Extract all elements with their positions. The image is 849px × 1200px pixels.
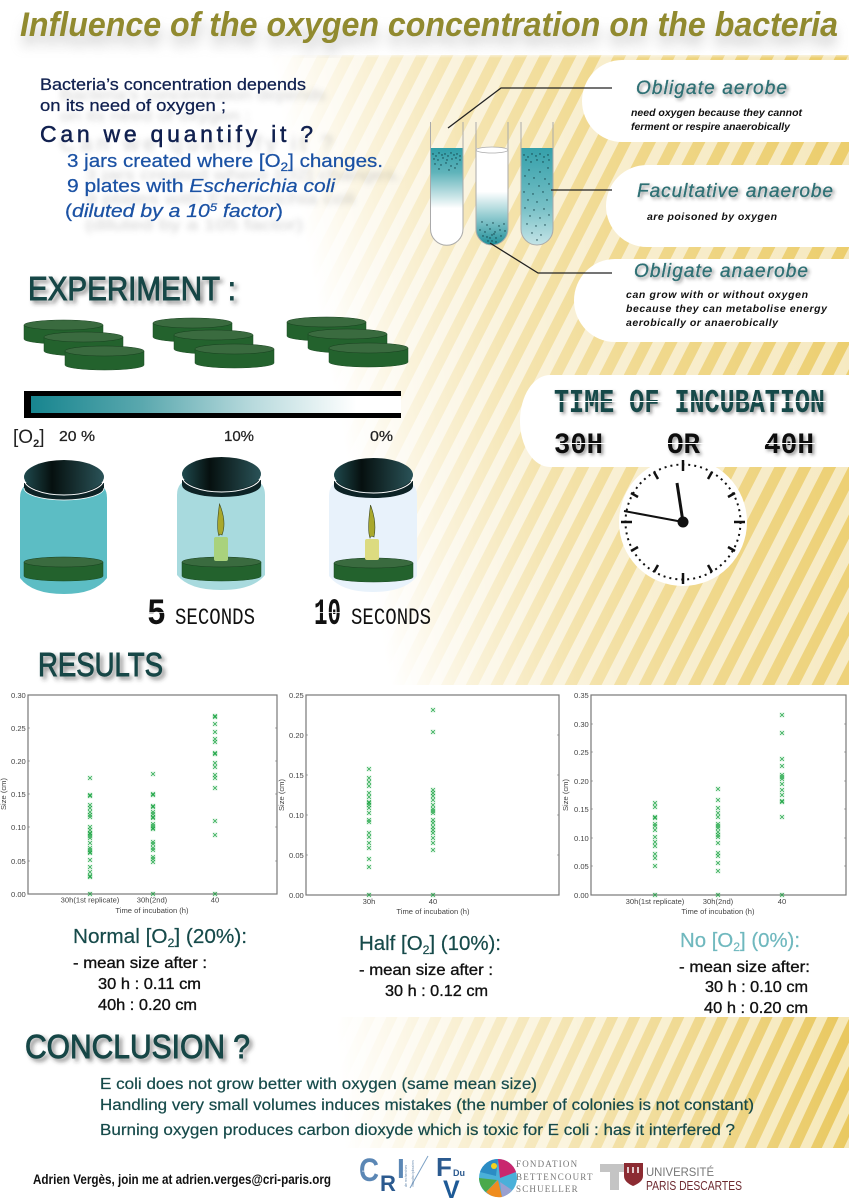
result: no oxygen: No [O	[680, 930, 732, 952]
panel: obligate anaerobe: Obligate anaerobe	[634, 261, 808, 282]
intro text block: (diluted by a 10	[65, 201, 189, 221]
panel: obligate anaerobe: can grow with or without oxygen	[626, 289, 808, 301]
chart: normal oxygen: 0.25	[11, 724, 26, 733]
logo: FDV: Du	[453, 1168, 465, 1178]
candle	[214, 504, 228, 561]
intro shadow: on its need of oxygen ;	[60, 108, 250, 125]
tube: obligate aerobe	[430, 122, 463, 245]
intro text block: 3 jars created where [O	[67, 151, 254, 171]
plates: set one	[24, 320, 144, 370]
oxygen scale labels: [O	[13, 427, 33, 448]
chart: normal oxygen: 0.20	[11, 757, 26, 766]
chart: normal oxygen: 30h(1st replicate)	[61, 896, 120, 904]
logo: Fondation Bettencourt Schueller: FONDATION	[516, 1159, 578, 1169]
panel: obligate anaerobe: because they can metabolise energy	[626, 303, 828, 315]
chart: no oxygen: 0.15	[574, 805, 589, 814]
logo: Université Paris Descartes: UNIVERSITÉ	[646, 1164, 714, 1179]
panel: facultative anaerobe: Facultative anaerobe	[637, 181, 833, 202]
logo: Fondation Bettencourt Schueller: BETTENCOURT	[516, 1172, 594, 1182]
striped background: upper area	[0, 52, 849, 685]
logo: CRI: R	[380, 1171, 396, 1196]
oxygen scale labels: 2	[33, 438, 39, 450]
chart: half oxygen: 40	[429, 897, 437, 906]
oxygen scale labels: 0%	[370, 429, 393, 445]
label: 10 seconds: SECONDS	[351, 605, 431, 631]
conclusion text: E coli does not grow better with oxygen (same mean size)	[100, 1076, 537, 1093]
heading: experiment: EXPERIMENT :	[28, 270, 236, 307]
label: 10 seconds: 10	[314, 594, 341, 636]
chart: normal oxygen: 0.10	[11, 823, 26, 832]
result: no oxygen	[679, 930, 810, 1017]
chart: normal oxygen: 0.15	[11, 790, 26, 799]
oxygen scale labels: ]	[39, 427, 44, 448]
chart: half oxygen: 0.15	[289, 771, 304, 780]
plates: set two	[153, 318, 274, 368]
chart: half oxygen: 0.25	[289, 691, 304, 700]
chart: half oxygen: Time of incubation (h)	[396, 907, 470, 916]
intro text block: factor	[217, 201, 277, 221]
intro text block: on its need of oxygen ;	[40, 97, 226, 115]
chart: normal oxygen: 40	[211, 896, 219, 904]
striped background: conclusion area	[0, 1017, 849, 1148]
result: half oxygen: Half [O	[359, 933, 421, 955]
intro shadow: (diluted by a 105 factor)	[85, 217, 303, 234]
chart: no oxygen: 30h(2nd)	[703, 897, 734, 906]
result: no oxygen: 2	[733, 940, 740, 954]
conclusion text: Burning oxygen produces carbon dioxyde which is toxic for E coli : has it interfered ?	[100, 1122, 735, 1139]
chart: normal oxygen: 30h(2nd)	[137, 896, 168, 904]
arrow: facultative tube to label	[551, 189, 612, 191]
panel: time of incubation: 30H	[554, 429, 603, 463]
intro shadow	[60, 87, 401, 234]
panel: facultative anaerobe: are poisoned by oxygen	[647, 211, 777, 223]
conclusion text: Handling very small volumes induces mistakes (the number of colonies is not constant)	[100, 1097, 754, 1114]
panel: obligate anaerobe: aerobically or anaerobically	[626, 317, 779, 329]
panel: obligate aerobe	[582, 60, 849, 142]
result: no oxygen: - mean size after:	[679, 959, 810, 976]
result: no oxygen: 30 h : 0.10 cm	[705, 979, 808, 996]
result: normal oxygen	[73, 926, 247, 1014]
chart: no oxygen	[561, 691, 846, 916]
chart: no oxygen: 0.30	[574, 720, 589, 729]
chart: no oxygen: 0.10	[574, 834, 589, 843]
chart: half oxygen: 0.00	[289, 891, 304, 900]
chart: normal oxygen: 0.05	[11, 857, 26, 866]
logo: Fondation Bettencourt Schueller	[479, 1159, 594, 1197]
chart: normal oxygen: 0.00	[11, 890, 26, 899]
chart: half oxygen: 0.10	[289, 811, 304, 820]
candle	[365, 505, 379, 560]
label: 5 seconds	[147, 594, 255, 636]
label: 5 seconds: 5	[147, 594, 166, 636]
panel: time of incubation: 40H	[764, 429, 814, 463]
arrow: aerobe tube to label	[448, 88, 612, 128]
panel: obligate aerobe: ferment or respire anaerobically	[631, 121, 791, 133]
logo: FDV: F	[436, 1152, 452, 1182]
chart: normal oxygen	[0, 691, 277, 915]
conclusion text	[100, 1076, 754, 1139]
intro text block: 9 plates with Escherichia coli	[67, 176, 336, 196]
panel: time of incubation: OR	[667, 429, 700, 463]
result: normal oxygen: ] (20%):	[174, 926, 247, 948]
result: half oxygen	[359, 933, 501, 1000]
plates: set three	[287, 317, 408, 367]
arrow: anaerobe tube to label	[490, 243, 612, 273]
chart: no oxygen: 0.05	[574, 862, 589, 871]
chart: no oxygen: 0.20	[574, 777, 589, 786]
logo: CRI: C	[359, 1152, 379, 1188]
intro shadow: 3 jars created where [O2] changes.	[85, 167, 401, 184]
jar: half oxygen with candle	[177, 457, 265, 590]
tube: facultative anaerobe	[521, 122, 553, 245]
logo: CRI: de recherches	[404, 1165, 408, 1187]
panel: obligate aerobe: need oxygen because they cannot	[631, 107, 803, 119]
logo: CRI: I	[397, 1153, 405, 1184]
test tubes	[430, 122, 553, 245]
oxygen scale labels	[13, 427, 393, 450]
intro text block: )	[276, 201, 282, 221]
intro text block: Can we quantify it ?	[40, 121, 313, 147]
chart: no oxygen: 0.35	[574, 691, 589, 700]
chart: normal oxygen: Time of incubation (h)	[115, 906, 189, 915]
oxygen scale labels: 10%	[224, 429, 254, 445]
intro text block: 5	[210, 202, 218, 214]
heading: conclusion: CONCLUSION ?	[25, 1028, 250, 1065]
chart: half oxygen	[277, 691, 559, 916]
logo: CRI: interdisciplinaires	[411, 1160, 415, 1187]
result: normal oxygen: 30 h : 0.11 cm	[98, 976, 201, 993]
logo: Université Paris Descartes	[600, 1163, 742, 1193]
result: no oxygen: ] (0%):	[740, 930, 800, 952]
chart: half oxygen: 0.05	[289, 851, 304, 860]
result: half oxygen: 30 h : 0.12 cm	[385, 983, 488, 1000]
chart: no oxygen: 40	[778, 897, 786, 906]
result: normal oxygen: 2	[167, 936, 175, 950]
label: 5 seconds: SECONDS	[175, 605, 255, 631]
jar: no oxygen with candle	[329, 458, 417, 592]
logo: Université Paris Descartes: PARIS DESCARTES	[646, 1178, 742, 1193]
chart: half oxygen: Size (cm)	[277, 778, 286, 811]
jar: normal oxygen	[20, 460, 107, 594]
result: half oxygen: 2	[423, 943, 430, 957]
heading: results: RESULTS	[38, 646, 163, 683]
chart: no oxygen: Time of incubation (h)	[681, 907, 755, 916]
panel: obligate anaerobe	[574, 259, 849, 342]
panel: obligate aerobe: Obligate aerobe	[636, 78, 787, 99]
intro text block: 2	[281, 160, 289, 174]
logo: FDV	[436, 1152, 465, 1200]
intro shadow: 9 plates with Escherichia coli	[85, 191, 355, 208]
oxygen scale labels: 20 %	[59, 429, 95, 445]
oxygen gradient bar	[24, 391, 401, 418]
logo: Fondation Bettencourt Schueller: SCHUELLER	[516, 1184, 579, 1194]
footer author credit: Adrien Vergès, join me at adrien.verges@cri-paris.org	[33, 1172, 331, 1187]
label: 10 seconds	[314, 594, 431, 636]
intro text block	[40, 76, 401, 234]
logo: CRI	[359, 1152, 428, 1196]
result: normal oxygen: - mean size after :	[73, 955, 207, 972]
chart: no oxygen: 30h(1st replicate)	[626, 897, 685, 906]
chart: normal oxygen: 0.30	[11, 691, 26, 700]
intro text block: ] changes.	[288, 151, 383, 171]
chart: no oxygen: 0.25	[574, 748, 589, 757]
panel: time of incubation	[520, 375, 849, 467]
clock	[619, 458, 747, 586]
chart: half oxygen: 0.20	[289, 731, 304, 740]
result: normal oxygen: Normal [O	[73, 926, 164, 948]
chart: no oxygen: 0.00	[574, 891, 589, 900]
result: half oxygen: - mean size after :	[359, 962, 493, 979]
intro shadow: Can we quantify it ?	[60, 131, 333, 156]
chart: no oxygen: Size (cm)	[561, 778, 570, 811]
tube: obligate anaerobe	[476, 122, 508, 245]
panel: facultative anaerobe	[606, 165, 849, 247]
result: normal oxygen: 40h : 0.20 cm	[98, 997, 197, 1014]
intro shadow: Bacteria’s concentration depends	[60, 87, 326, 104]
result: no oxygen: 40 h : 0.20 cm	[704, 1000, 808, 1017]
chart: half oxygen: 30h	[363, 897, 375, 906]
logo: CRI: centre	[362, 1169, 371, 1173]
intro text block: Bacteria’s concentration depends	[40, 76, 306, 94]
result: half oxygen: ] (10%):	[429, 933, 501, 955]
